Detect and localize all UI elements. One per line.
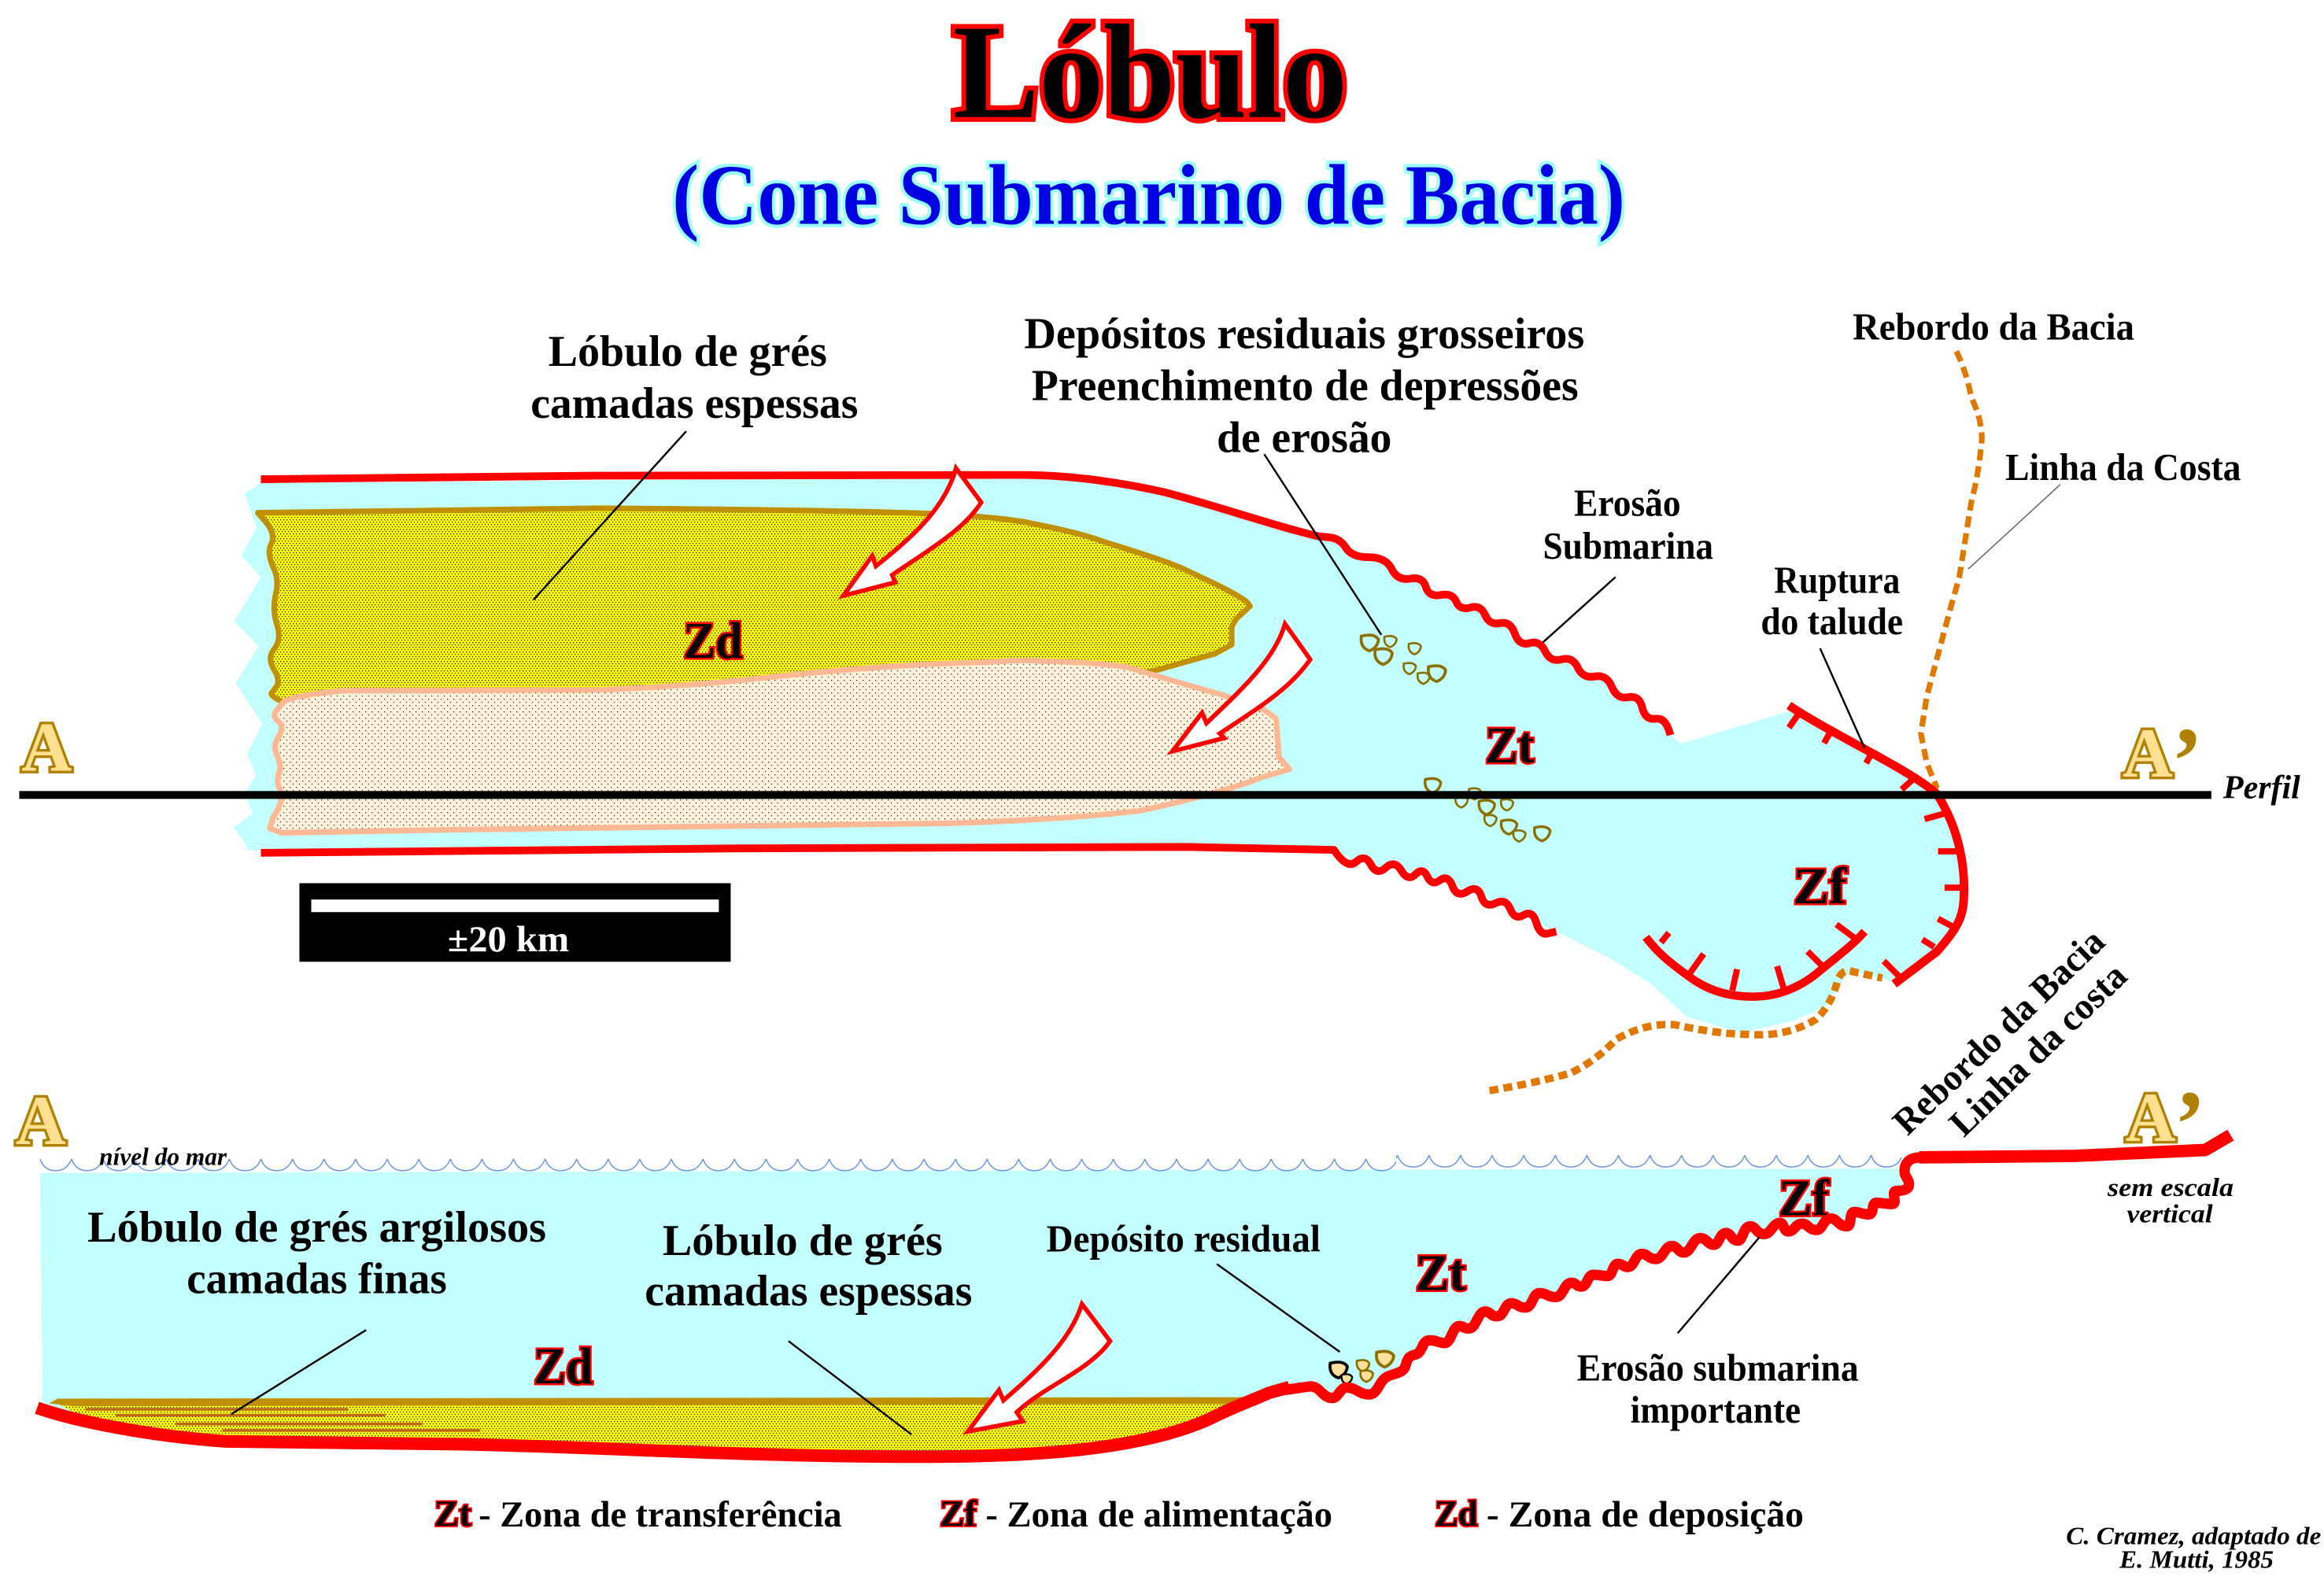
sea surface waves right	[1396, 1155, 1901, 1170]
label: thick sandstone lobe	[530, 327, 858, 428]
label: residual deposits	[1024, 310, 1584, 462]
subtitle: (Cone Submarino de Bacia)	[672, 147, 1625, 242]
lobe top band	[49, 1397, 1257, 1406]
shelf red line	[1919, 1135, 2230, 1157]
label: no vertical scale: vertical	[2127, 1201, 2214, 1229]
credit: E. Mutti, 1985	[2119, 1545, 2274, 1574]
credit: C. Cramez, adaptado de	[2066, 1521, 2321, 1549]
label: no vertical scale	[2107, 1174, 2233, 1229]
label: profile: Perfil	[2222, 769, 2300, 806]
label: residual deposit: Depósito residual	[1047, 1216, 1321, 1260]
thin beds	[85, 1409, 480, 1430]
profile line	[19, 791, 2211, 799]
label: thick lobe section: Lóbulo de grés	[663, 1216, 943, 1265]
pebbles lower group	[1425, 778, 1550, 842]
label: residual deposits: de erosão	[1217, 413, 1391, 462]
zone label Zd plan: Zd	[683, 612, 743, 670]
panel: cross section	[37, 1135, 2230, 1456]
slope break scarp with ticks	[1789, 705, 1964, 984]
rotated label: basin edge: Rebordo da Bacia	[1885, 921, 2113, 1143]
zone label Zd section: Zd	[534, 1338, 593, 1395]
legend Zt: Zt	[434, 1493, 471, 1534]
scale bar	[299, 883, 730, 962]
sand lobe section fill	[57, 1401, 1257, 1456]
label: thin clay lobe	[87, 1203, 546, 1304]
label: slope break: do talude	[1761, 600, 1903, 643]
leader lines plan view	[534, 431, 2060, 748]
legend Zd: Zd	[1435, 1493, 1478, 1534]
clay-rich sandstone lobe, thin beds	[270, 660, 1289, 832]
title: Lóbulo	[953, 0, 1347, 147]
label: submarine erosion: Submarina	[1543, 524, 1713, 567]
zone label Zt section: Zt	[1416, 1244, 1466, 1301]
transfer zone margin, lower erosion line	[260, 847, 1556, 934]
marker A prime plan: A	[2123, 715, 2173, 792]
label: major submarine erosion: importante	[1631, 1388, 1801, 1431]
label: basin edge: Rebordo da Bacia	[1853, 305, 2134, 348]
legend	[434, 1493, 1804, 1535]
label: sea level: nível do mar	[99, 1142, 227, 1170]
sea surface waves left	[40, 1159, 1396, 1174]
rotated label: coastline: Linha da costa	[1942, 955, 2135, 1144]
legend Zt: - Zona de transferência	[478, 1494, 842, 1535]
pebbles upper group	[1362, 635, 1446, 684]
label: residual deposits: Depósitos residuais grosseiros	[1024, 310, 1584, 359]
marker A prime section: A	[2126, 1080, 2176, 1157]
label: coastline: Linha da Costa	[2005, 445, 2241, 489]
marker A prime plan	[2123, 710, 2203, 814]
arrow: sediment flow section	[968, 1304, 1110, 1431]
label: major submarine erosion: Erosão submarina	[1577, 1346, 1859, 1389]
marker A plan: A	[21, 710, 72, 787]
label: submarine erosion	[1543, 481, 1713, 567]
label: thin clay lobe: camadas finas	[187, 1255, 447, 1304]
label: slope break: Ruptura	[1774, 558, 1900, 601]
panel: plan view map	[234, 351, 2060, 1091]
label: major submarine erosion	[1577, 1346, 1859, 1431]
marker A prime section	[2126, 1072, 2206, 1177]
legend Zd: - Zona de deposição	[1487, 1494, 1804, 1535]
shelf edge dashed line, lower	[1490, 971, 1882, 1091]
water body section	[40, 1168, 1909, 1438]
water body plan view	[234, 477, 1964, 1033]
label: thick lobe section: camadas espessas	[645, 1267, 972, 1316]
zone label Zf plan: Zf	[1794, 858, 1848, 915]
label: no vertical scale: sem escala	[2107, 1174, 2233, 1202]
label: thick lobe section	[645, 1216, 972, 1316]
arrow: sediment flow into thick lobe	[844, 468, 981, 596]
zone label Zf section: Zf	[1779, 1169, 1830, 1227]
legend Zf: Zf	[940, 1493, 977, 1534]
arrow: sediment flow into thin lobe	[1173, 624, 1310, 751]
leader lines section	[231, 1238, 1759, 1434]
label: submarine erosion: Erosão	[1574, 481, 1681, 524]
label: thick sandstone lobe: Lóbulo de grés	[549, 327, 827, 376]
label: residual deposits: Preenchimento de depressões	[1032, 361, 1579, 410]
transfer zone margin, upper erosion line	[260, 475, 1670, 735]
pebbles section	[1330, 1351, 1394, 1384]
shelf edge dashed line, upper	[1921, 351, 1982, 788]
marker A prime section: ’	[2174, 1072, 2206, 1177]
credit	[2066, 1521, 2321, 1574]
label: thin clay lobe: Lóbulo de grés argilosos	[87, 1203, 546, 1252]
label: thick sandstone lobe: camadas espessas	[530, 379, 858, 428]
basin floor red line	[37, 1387, 1289, 1456]
erosional slope red line	[1275, 1157, 1921, 1398]
legend Zf: - Zona de alimentação	[985, 1494, 1332, 1535]
label: slope break	[1761, 558, 1903, 643]
sandstone lobe, thick beds	[258, 508, 1250, 703]
inner scarp with ticks	[1646, 925, 1864, 997]
scale bar: ±20 km	[448, 919, 569, 960]
marker A section: A	[16, 1083, 66, 1160]
zone label Zt plan: Zt	[1485, 717, 1534, 774]
marker A prime plan: ’	[2171, 710, 2203, 814]
